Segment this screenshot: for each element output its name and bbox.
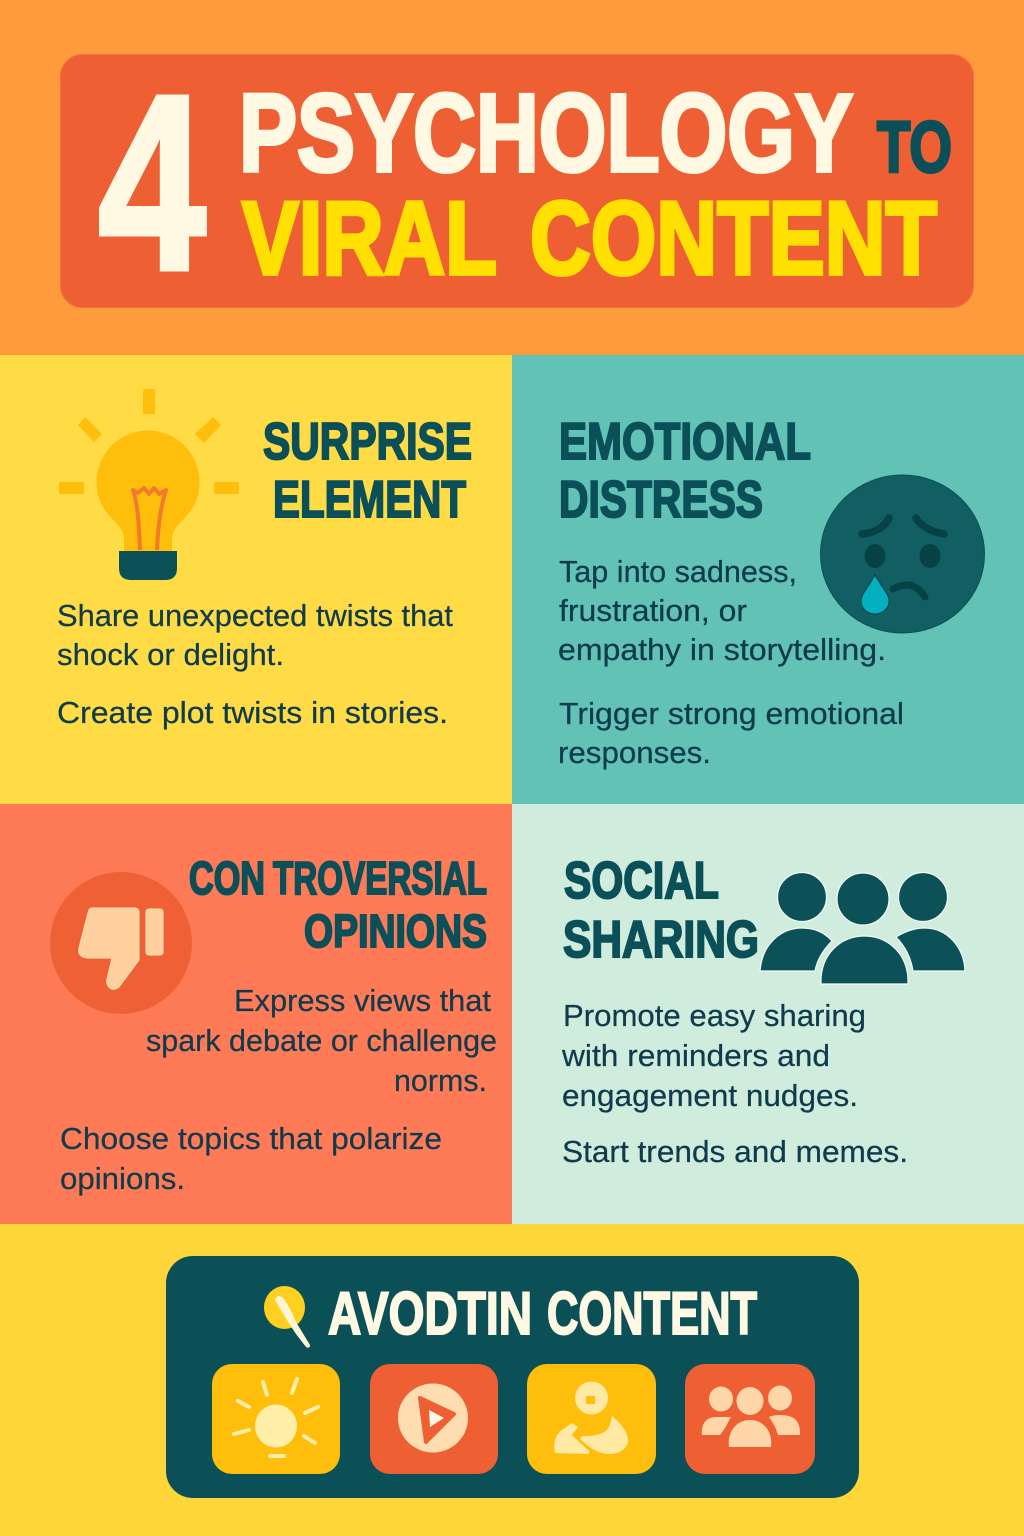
text: surprise description: shock or delight. (57, 637, 284, 672)
heading: surprise element: ELEMENT (273, 471, 466, 529)
text: social description: engagement nudges. (562, 1078, 858, 1113)
text: social description: Start trends and memes. (562, 1134, 908, 1169)
icon: group of people (760, 872, 965, 984)
heading: controversial opinions (189, 852, 487, 957)
heading: controversial opinions: OPINIONS (304, 905, 487, 957)
heading: controversial opinions: CON (189, 852, 265, 904)
title line: PSYCHOLOGY TO: TO (877, 108, 952, 188)
text: emotional description: Tap into sadness, (559, 554, 797, 589)
text: surprise description (57, 598, 453, 730)
header band (0, 0, 1024, 355)
heading: surprise element (263, 413, 472, 529)
text: emotional description: Trigger strong emotional (559, 696, 904, 731)
text: controversial description: Express views that (234, 983, 491, 1018)
title line: PSYCHOLOGY TO: PSYCHOLOGY (239, 72, 853, 195)
panel: controversial opinions (0, 804, 512, 1224)
text: controversial description (60, 983, 497, 1196)
text: emotional description (558, 554, 904, 770)
big numeral 4: 4 (98, 43, 206, 322)
heading: emotional distress: DISTRESS (559, 471, 763, 529)
icon tile: play button (370, 1364, 498, 1474)
heading: social sharing: SOCIAL (564, 852, 719, 910)
footer band (0, 1224, 1024, 1536)
heading: social sharing: SHARING (563, 911, 759, 969)
title panel (60, 43, 974, 322)
text: controversial description: opinions. (60, 1161, 185, 1196)
heading: controversial opinions: TROVERSIAL (273, 852, 487, 904)
text: controversial description: norms. (394, 1063, 487, 1098)
footer heading: CONTENT (547, 1280, 757, 1347)
text: controversial description: spark debate or challenge (146, 1023, 497, 1058)
text: surprise description: Share unexpected twists that (57, 598, 453, 633)
text: controversial description: Choose topics that polarize (60, 1121, 442, 1156)
text: emotional description: frustration, or (559, 593, 747, 628)
text: surprise description: Create plot twists in stories. (57, 695, 448, 730)
icon tile: sun bulb (212, 1364, 340, 1474)
panel: emotional distress (512, 355, 1024, 804)
title line: VIRAL CONTENT: CONTENT (530, 181, 937, 297)
icon tile: group (685, 1364, 815, 1474)
panel: surprise element (0, 355, 512, 804)
text: social description (561, 998, 908, 1169)
footer heading: AVODTIN (328, 1280, 532, 1347)
text: social description: Promote easy sharing (563, 998, 866, 1033)
icon: light bulb (59, 389, 239, 580)
icon: magnifier (264, 1286, 310, 1348)
icon tile: person (527, 1364, 656, 1474)
text: social description: with reminders and (561, 1038, 830, 1073)
heading: emotional distress (559, 413, 811, 529)
panel: social sharing (512, 804, 1024, 1224)
title line: VIRAL CONTENT (242, 181, 937, 297)
heading: emotional distress: EMOTIONAL (559, 413, 811, 471)
footer heading (328, 1280, 757, 1347)
icon: crying face (820, 475, 984, 633)
title line: VIRAL CONTENT: VIRAL (242, 181, 497, 297)
icon: thumbs down (50, 872, 192, 1014)
text: emotional description: empathy in storytelling. (558, 632, 886, 667)
text: emotional description: responses. (558, 735, 711, 770)
footer panel (166, 1256, 859, 1498)
heading: social sharing (563, 852, 759, 969)
heading: surprise element: SURPRISE (263, 413, 472, 471)
